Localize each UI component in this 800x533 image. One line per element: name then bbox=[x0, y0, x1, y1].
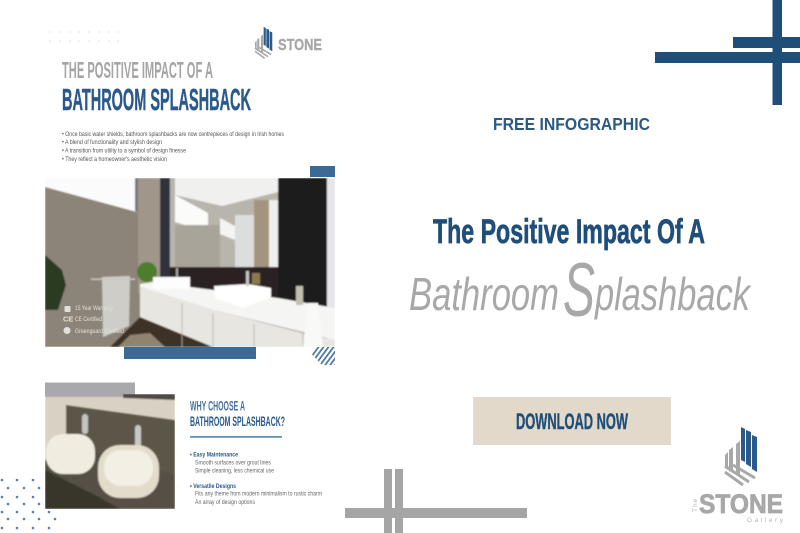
warranty list bbox=[63, 305, 124, 335]
small logo bbox=[255, 27, 322, 58]
accent block below photo bbox=[124, 347, 256, 359]
heading: infographic title bbox=[62, 57, 251, 117]
text block: intro bullets bbox=[62, 131, 284, 163]
text block: intro bullets: • A transition from utility to a symbol of design finesse bbox=[62, 148, 186, 154]
logo wordmark: STONE bbox=[699, 489, 783, 519]
label: free infographic: FREE INFOGRAPHIC bbox=[493, 114, 650, 134]
text block: benefits: Fits any theme from modern minimalism to rustic charm bbox=[195, 490, 322, 498]
accent block top right of photo bbox=[310, 166, 335, 177]
text block: intro bullets: • Once basic water shields, bathroom splashbacks are now centrepieces of design in Irish homes bbox=[62, 131, 284, 138]
blue cross lines top right bbox=[655, 0, 800, 105]
logo bottom right: The bbox=[692, 498, 699, 512]
striped corner bbox=[312, 347, 335, 365]
decorative dot grid top bbox=[49, 31, 119, 42]
text block: intro bullets: • They reflect a homeowner's aesthetic vision bbox=[62, 156, 167, 163]
download button: DOWNLOAD NOW bbox=[516, 409, 628, 434]
heading: why choose: WHY CHOOSE A bbox=[190, 398, 245, 414]
icon: globe bbox=[64, 327, 70, 334]
plants bbox=[137, 262, 157, 282]
icon: small logo mark bbox=[255, 27, 272, 58]
text block: benefits bbox=[190, 452, 322, 506]
divider under heading bbox=[190, 436, 282, 438]
text block: benefits: Simple cleaning, less chemical use bbox=[195, 468, 274, 474]
towels and bottle bbox=[102, 276, 130, 337]
icon: lock bbox=[64, 306, 70, 312]
text block: benefits: • Easy Maintenance bbox=[190, 452, 238, 458]
warranty list: 15 Year Warranty bbox=[75, 305, 114, 312]
panel: infographic preview bbox=[49, 27, 355, 372]
script subtitle: plashback bbox=[594, 268, 751, 320]
icon: CE mark: CE bbox=[63, 314, 73, 324]
small logo wordmark: STONE bbox=[278, 37, 322, 54]
floor bbox=[110, 317, 213, 347]
logo bottom right: Gallery bbox=[747, 517, 784, 524]
warranty list: Greenguard Certified bbox=[75, 328, 124, 335]
script subtitle: S bbox=[563, 248, 595, 333]
logo bottom right bbox=[692, 427, 784, 524]
accent block behind second photo bbox=[45, 382, 135, 396]
decorative dot grid bottom left bbox=[1, 479, 56, 529]
gray cross lines bottom bbox=[345, 469, 527, 533]
text block: intro bullets: • A blend of functionality and stylish design bbox=[62, 139, 162, 146]
text block: benefits: An array of design options bbox=[195, 499, 255, 506]
download button bbox=[473, 397, 671, 445]
sinks bbox=[153, 277, 190, 289]
heading: infographic title: THE POSITIVE IMPACT OF A bbox=[62, 57, 213, 83]
photo: bathroom vanity bbox=[45, 178, 335, 347]
script subtitle: Bathroom bbox=[409, 268, 559, 320]
cabinets bbox=[140, 287, 335, 347]
script subtitle bbox=[409, 248, 751, 333]
text block: benefits: • Versatile Designs bbox=[190, 483, 236, 490]
text: BATHROOM SPLASHBACK? bbox=[190, 413, 285, 429]
mirror bbox=[170, 178, 278, 267]
heading: why choose bbox=[190, 398, 285, 429]
icon: logo mark bbox=[725, 427, 757, 485]
panel: infographic preview: BATHROOM SPLASHBACK bbox=[62, 82, 251, 117]
text block: benefits: Smooth surfaces over grout lines bbox=[195, 460, 271, 466]
counter bbox=[140, 282, 335, 340]
warranty list: CE Certified bbox=[75, 316, 102, 323]
photo: marble basins bbox=[45, 394, 175, 509]
